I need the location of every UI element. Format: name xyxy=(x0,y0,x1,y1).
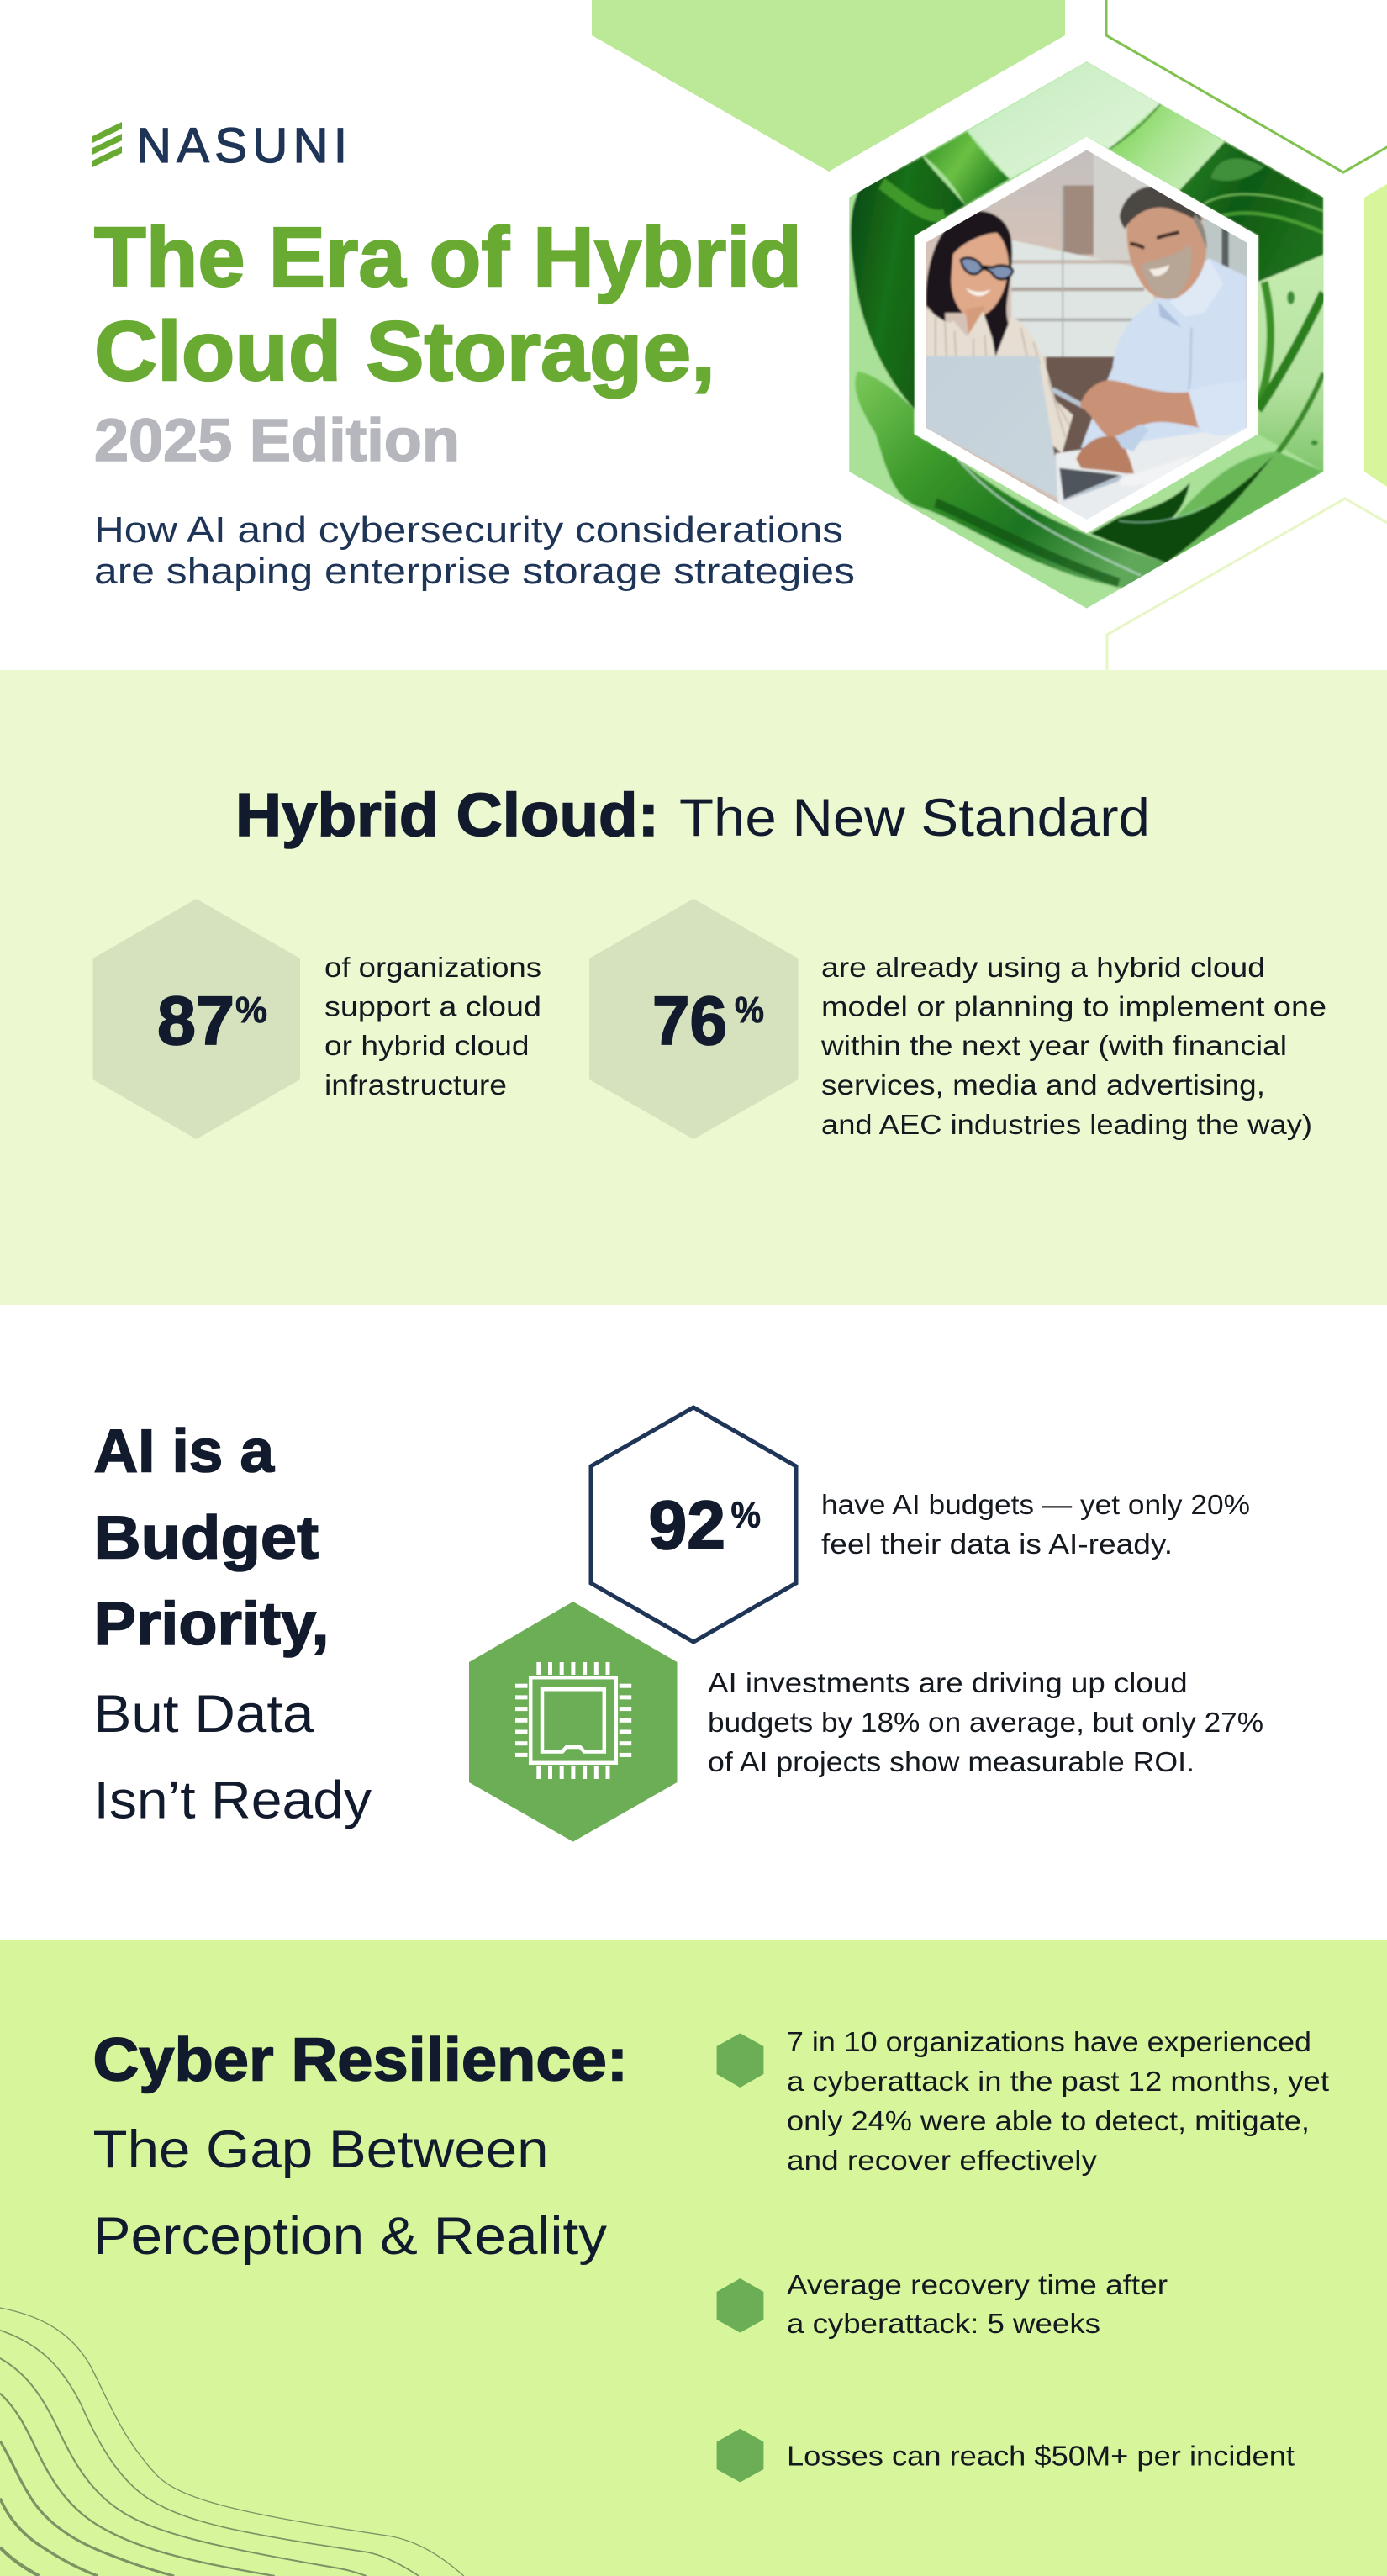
laptop xyxy=(926,356,1062,501)
panel: header xyxy=(92,0,1387,670)
bullet: cyberattack stats xyxy=(717,2026,1329,2176)
heading: AI is a Budget Priority: Priority, xyxy=(94,1591,330,1658)
stat: 92%: % xyxy=(731,1495,761,1535)
decorative hexagon: top light green xyxy=(592,0,1065,172)
panel: AI budget xyxy=(94,1407,1263,1842)
title xyxy=(94,210,802,399)
text: 76% description: are already using a hybrid cloud xyxy=(821,952,1265,983)
heading: AI is a Budget Priority: But Data xyxy=(94,1685,315,1744)
hands xyxy=(1080,380,1200,437)
heading: AI is a Budget Priority: AI is a xyxy=(94,1417,275,1485)
heading: Cyber Resilience xyxy=(92,2026,628,2266)
edition subtitle: 2025 Edition xyxy=(94,408,460,474)
heading: AI is a Budget Priority xyxy=(94,1417,372,1829)
decorative hexagon: bottom right outline xyxy=(1107,499,1387,670)
bullet: cyberattack stats: only 24% were able to detect, mitigate, xyxy=(787,2105,1310,2136)
text: 76% description xyxy=(820,952,1326,1140)
stat: 87%: % xyxy=(235,990,267,1031)
stat: 87%: 87 xyxy=(157,983,235,1059)
text: 76% description: model or planning to implement one xyxy=(821,990,1326,1022)
stat: 87% xyxy=(92,899,300,1139)
stat: 76%: % xyxy=(735,990,764,1031)
heading: Cyber Resilience: Perception & Reality xyxy=(92,2207,608,2266)
heading: Hybrid Cloud: The New Standard xyxy=(679,789,1150,847)
bullet: cyberattack stats: and recover effectively xyxy=(787,2145,1098,2176)
man xyxy=(1081,258,1247,459)
tagline: are shaping enterprise storage strategies xyxy=(94,551,855,592)
bullet: recovery time: Average recovery time after xyxy=(787,2269,1168,2300)
text: AI investments: AI investments are driving up cloud xyxy=(708,1667,1188,1698)
bullet: cyberattack stats: 7 in 10 organizations have experienced xyxy=(787,2026,1311,2057)
heading: Hybrid Cloud xyxy=(235,782,1150,849)
heading: Cyber Resilience: The Gap Between xyxy=(92,2120,548,2179)
white hexagon frame xyxy=(915,137,1258,533)
logo: Nasuni: NASUNI xyxy=(136,119,347,173)
stat: 76%: 76 xyxy=(652,983,727,1059)
icon: AI chip in green hexagon xyxy=(469,1602,678,1842)
text: AI investments: budgets by 18% on average, but only 27% xyxy=(708,1707,1263,1738)
bullet: losses: Losses can reach $50M+ per incident xyxy=(787,2440,1295,2472)
heading: AI is a Budget Priority: Isn’t Ready xyxy=(94,1771,372,1829)
text: 87% description xyxy=(324,952,541,1101)
text: 76% description: services, media and advertising, xyxy=(821,1069,1265,1101)
text: AI investments xyxy=(708,1667,1263,1777)
woman xyxy=(926,210,1014,356)
stat: 92% xyxy=(591,1407,796,1642)
text: 92% description xyxy=(821,1489,1250,1560)
bullet: losses xyxy=(717,2429,1295,2482)
green swirl background xyxy=(841,50,1337,622)
bullet: cyberattack stats: a cyberattack in the past 12 months, yet xyxy=(787,2066,1329,2097)
text: 87% description: or hybrid cloud xyxy=(324,1030,530,1061)
photo: two colleagues at a laptop xyxy=(923,145,1252,525)
text: 87% description: infrastructure xyxy=(324,1069,507,1101)
panel: Cyber Resilience xyxy=(0,1940,1387,2576)
tagline: How AI and cybersecurity considerations xyxy=(94,509,843,551)
decorative hexagon: top right outline xyxy=(1106,0,1387,172)
text: 76% description: within the next year (with financial xyxy=(820,1030,1287,1061)
stat: 92%: 92 xyxy=(649,1487,725,1564)
decorative wave lines xyxy=(0,2308,464,2576)
panel: Hybrid Cloud xyxy=(0,670,1387,1305)
heading: AI is a Budget Priority: Budget xyxy=(94,1505,319,1572)
pen xyxy=(1051,386,1084,410)
text: 87% description: of organizations xyxy=(324,952,541,983)
bullet: recovery time xyxy=(717,2269,1168,2339)
text: AI investments: of AI projects show measurable ROI. xyxy=(708,1746,1195,1777)
text: 76% description: and AEC industries leading the way) xyxy=(821,1109,1312,1140)
heading: Cyber Resilience: Cyber Resilience: xyxy=(92,2026,628,2093)
text: 87% description: support a cloud xyxy=(324,990,541,1022)
hero image: hexagon with green swirl and photo of two colleagues xyxy=(841,50,1337,622)
stat: 76% xyxy=(589,899,799,1139)
bullet: recovery time: a cyberattack: 5 weeks xyxy=(787,2308,1100,2339)
text: 92% description: feel their data is AI-ready. xyxy=(821,1528,1173,1560)
title: Cloud Storage, xyxy=(94,304,715,399)
title: The Era of Hybrid xyxy=(94,210,802,304)
heading: Hybrid Cloud: Hybrid Cloud: xyxy=(235,782,659,849)
decorative hexagon: right edge xyxy=(1364,184,1387,487)
text: 92% description: have AI budgets — yet only 20% xyxy=(821,1489,1250,1520)
tagline xyxy=(94,509,855,592)
